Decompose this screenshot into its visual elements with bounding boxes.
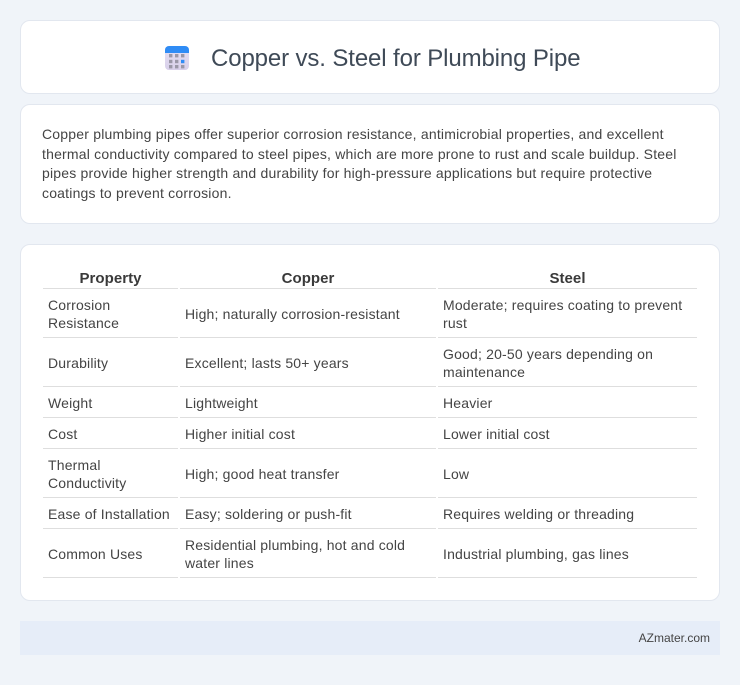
table rows: maintenance xyxy=(443,364,525,380)
table rows: High; naturally corrosion-resistant xyxy=(185,306,400,322)
table rows: rust xyxy=(443,315,467,331)
table rows: Moderate; requires coating to prevent xyxy=(443,297,682,313)
summary text: thermal conductivity compared to steel pipes, which are more prone to rust and scale buildup. Steel xyxy=(42,146,677,162)
icon: calendar xyxy=(165,46,189,70)
table rows: Heavier xyxy=(443,395,493,411)
table rows: Durability xyxy=(48,355,108,371)
table rows: Lightweight xyxy=(185,395,258,411)
footer credit: AZmater.com xyxy=(639,631,710,645)
column headers xyxy=(79,270,586,287)
table rows: Conductivity xyxy=(48,475,126,491)
table rows: Easy; soldering or push-fit xyxy=(185,506,352,522)
table rows: Cost xyxy=(48,426,78,442)
summary text: coatings to prevent corrosion. xyxy=(42,185,232,201)
table rows: Lower initial cost xyxy=(443,426,550,442)
table rows: High; good heat transfer xyxy=(185,466,340,482)
panel: table card xyxy=(20,244,720,601)
table rows: Excellent; lasts 50+ years xyxy=(185,355,349,371)
comparison table xyxy=(43,270,697,578)
table rows: Low xyxy=(443,466,469,482)
table rows: Resistance xyxy=(48,315,119,331)
column headers: Property xyxy=(79,270,142,287)
table rows: Corrosion xyxy=(48,297,110,313)
table rows: Common Uses xyxy=(48,546,143,562)
table rows: Ease of Installation xyxy=(48,506,170,522)
column headers: Copper xyxy=(282,270,334,287)
table rows: Requires welding or threading xyxy=(443,506,634,522)
table rows: Thermal xyxy=(48,457,101,473)
footer bar xyxy=(20,621,720,655)
table rows: Weight xyxy=(48,395,92,411)
title: Copper vs. Steel for Plumbing Pipe xyxy=(211,45,580,72)
summary text xyxy=(42,126,677,201)
column headers: Steel xyxy=(549,270,586,287)
table rows: Residential plumbing, hot and cold xyxy=(185,537,405,553)
summary text: Copper plumbing pipes offer superior corrosion resistance, antimicrobial properties, and excellent xyxy=(42,126,664,142)
panel: summary xyxy=(20,104,720,224)
table rows: Industrial plumbing, gas lines xyxy=(443,546,629,562)
table rows: water lines xyxy=(185,555,254,571)
table rows: Higher initial cost xyxy=(185,426,295,442)
summary text: pipes provide higher strength and durability for high-pressure applications but require protective xyxy=(42,165,652,181)
table rows: Good; 20-50 years depending on xyxy=(443,346,653,362)
title panel xyxy=(20,20,720,94)
